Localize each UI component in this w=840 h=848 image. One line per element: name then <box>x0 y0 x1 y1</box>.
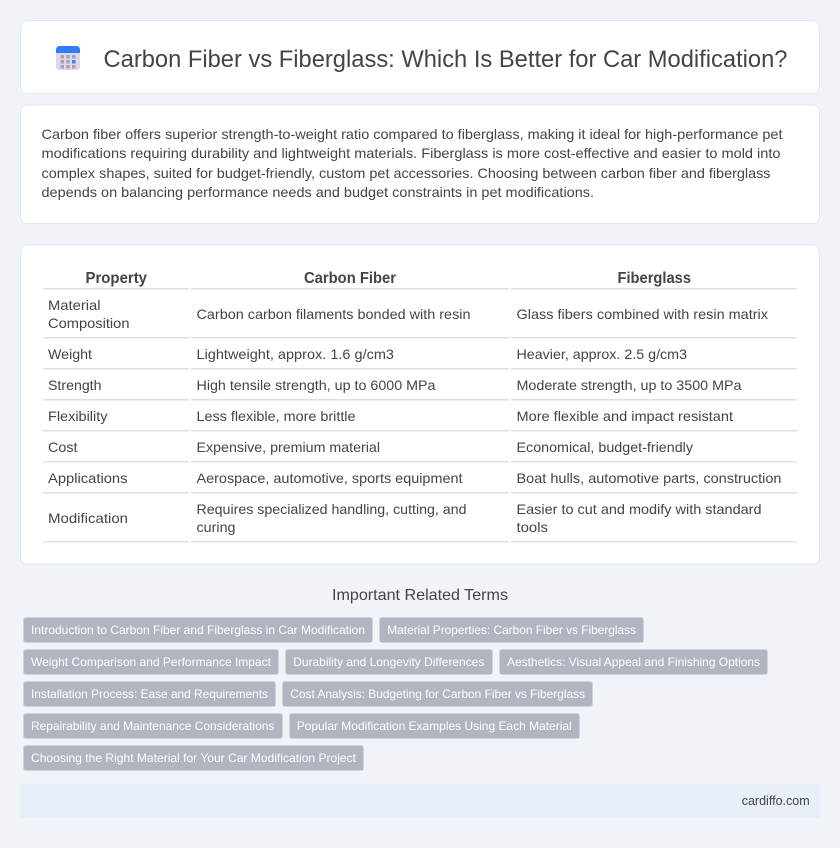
chip: material properties <box>380 618 644 642</box>
row: flexibility: Less flexible, more brittle <box>196 408 356 424</box>
row: flexibility: Flexibility <box>48 408 108 424</box>
text block: summary paragraph: complex shapes, suited for budget-friendly, custom pet accessories. Choosing between carbon fiber and fiberglass <box>42 165 770 181</box>
row: material composition <box>48 297 768 331</box>
chip: aesthetics: Aesthetics: Visual Appeal and Finishing Options <box>507 655 760 669</box>
row: applications <box>48 470 782 486</box>
row: strength: High tensile strength, up to 6000 MPa <box>196 377 436 393</box>
row: modification: Easier to cut and modify with standard <box>516 501 762 517</box>
row: modification: Modification <box>48 510 128 526</box>
row: applications: Boat hulls, automotive parts, construction <box>516 470 782 486</box>
text block: summary paragraph <box>42 126 783 200</box>
chip: repairability: Repairability and Maintenance Considerations <box>31 719 274 733</box>
row: weight: Heavier, approx. 2.5 g/cm3 <box>516 346 687 362</box>
row: strength: Moderate strength, up to 3500 MPa <box>516 377 742 393</box>
chip: cost analysis <box>282 682 592 706</box>
row: flexibility <box>48 408 733 424</box>
row: applications: Aerospace, automotive, sports equipment <box>196 470 463 486</box>
footer source label: cardiffo.com <box>742 794 810 808</box>
row: flexibility: More flexible and impact resistant <box>516 408 733 424</box>
row: weight: Lightweight, approx. 1.6 g/cm3 <box>196 346 394 362</box>
chip: material properties: Material Properties: Carbon Fiber vs Fiberglass <box>387 623 636 637</box>
chip: introduction: Introduction to Carbon Fiber and Fiberglass in Car Modification <box>31 623 365 637</box>
text block: summary paragraph: Carbon fiber offers superior strength-to-weight ratio compared to fiberglass, making it ideal for high-performance pet <box>42 126 783 142</box>
row: material composition: Composition <box>48 315 130 331</box>
row: material composition: Carbon carbon filaments bonded with resin <box>196 306 470 322</box>
table header row <box>86 270 691 287</box>
table header row: Property <box>86 270 147 287</box>
row: strength <box>48 377 742 393</box>
chip: weight comparison: Weight Comparison and Performance Impact <box>31 655 272 669</box>
row: weight: Weight <box>48 346 92 362</box>
row: material composition: Material <box>48 297 100 313</box>
row: modification: Requires specialized handling, cutting, and <box>196 501 466 517</box>
chip: durability: Durability and Longevity Differences <box>293 655 484 669</box>
row: cost: Economical, budget-friendly <box>516 439 693 455</box>
title: Carbon Fiber vs Fiberglass: Which Is Better for Car Modification? <box>104 46 788 73</box>
icon: calendar <box>56 46 80 70</box>
chip: repairability <box>24 714 282 738</box>
chip: popular examples <box>290 714 580 738</box>
chip: durability <box>286 650 492 674</box>
chip: installation <box>24 682 276 706</box>
row: cost: Cost <box>48 439 78 455</box>
chip: installation: Installation Process: Ease and Requirements <box>31 687 268 701</box>
chip: introduction <box>24 618 372 642</box>
text block: summary paragraph: modifications requiring durability and lightweight materials. Fiberglass is more cost-effective and easier to mold into <box>42 145 781 161</box>
text block: summary paragraph: depends on balancing performance needs and budget constraints in pet modifications. <box>42 184 594 200</box>
row: weight <box>48 346 687 362</box>
chip: popular examples: Popular Modification Examples Using Each Material <box>297 719 572 733</box>
row: cost <box>48 439 693 455</box>
row: material composition: Glass fibers combined with resin matrix <box>516 306 768 322</box>
footer <box>20 784 820 818</box>
panel: related term chips <box>24 618 768 770</box>
row: cost: Expensive, premium material <box>196 439 380 455</box>
panel: comparison table <box>20 245 820 564</box>
chip: choosing material: Choosing the Right Material for Your Car Modification Project <box>31 751 357 765</box>
chip: aesthetics <box>500 650 768 674</box>
table header row: Fiberglass <box>618 270 691 287</box>
row: modification: tools <box>516 519 548 535</box>
heading: important related terms: Important Related Terms <box>332 587 508 604</box>
row: modification: curing <box>196 519 236 535</box>
chip: choosing material <box>24 746 364 770</box>
chip: cost analysis: Cost Analysis: Budgeting for Carbon Fiber vs Fiberglass <box>290 687 585 701</box>
row: modification <box>48 501 762 535</box>
panel: title header <box>20 20 820 94</box>
row: strength: Strength <box>48 377 102 393</box>
chip: weight comparison <box>24 650 278 674</box>
row: applications: Applications <box>48 470 128 486</box>
table header row: Carbon Fiber <box>304 270 396 287</box>
panel: introduction <box>20 105 820 224</box>
